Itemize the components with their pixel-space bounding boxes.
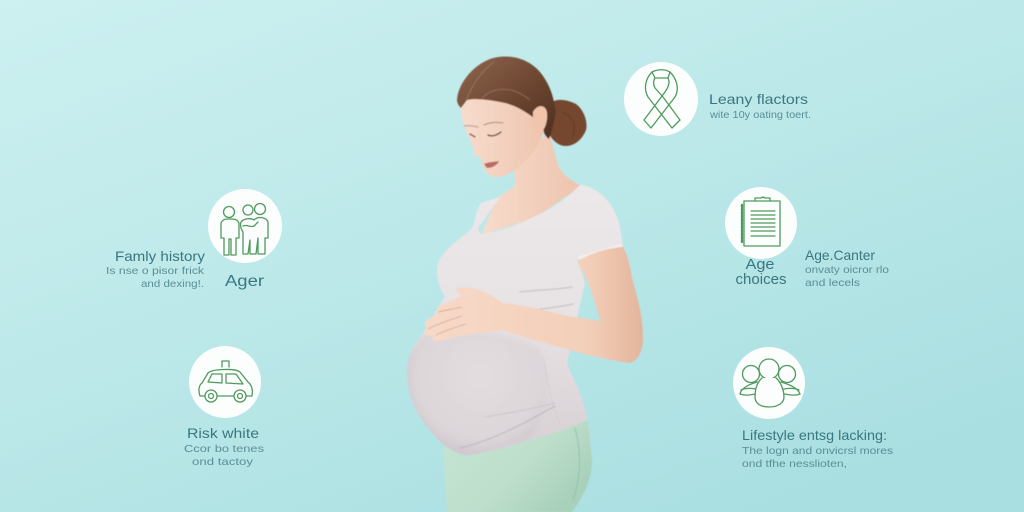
- icon circle: [624, 62, 698, 136]
- heading: family history: Famly history: [115, 248, 205, 264]
- arm and hand: [424, 247, 643, 363]
- caption line 1: Is nse o pisor frick: [106, 265, 205, 277]
- sleeve hem: [578, 245, 622, 258]
- heading: Risk white: [187, 425, 259, 441]
- hair bun: [548, 100, 587, 146]
- heading: Age.Canter: [805, 247, 875, 263]
- shirt folds: [460, 287, 573, 448]
- heading: Leany flactors: [709, 91, 808, 107]
- panel: lifestyle: [733, 347, 893, 470]
- heading: Lifestyle entsg lacking:: [742, 427, 887, 443]
- neck and chest: [481, 132, 581, 235]
- caption line 1: The logn and onvicrsl mores: [742, 445, 893, 457]
- icon: family: [221, 204, 268, 255]
- panel: risk white: [184, 346, 264, 468]
- icon: car: [199, 361, 252, 402]
- panel: family history: [106, 189, 282, 290]
- icon circle: [189, 346, 261, 418]
- lips: [484, 161, 499, 168]
- hair: [457, 57, 556, 139]
- caption line 2: ond tactoy: [192, 456, 254, 468]
- hair highlights: [466, 62, 574, 138]
- caption line 2: and dexing!.: [141, 278, 204, 290]
- finger lines: [428, 307, 466, 335]
- head and face: [461, 85, 548, 177]
- green trousers: [443, 420, 592, 512]
- icon: ribbon: [644, 70, 680, 128]
- belly shading: [407, 336, 462, 453]
- caption line 2: and lecels: [805, 277, 860, 289]
- panel: age choices: [725, 187, 889, 289]
- eye and brow: [464, 122, 503, 137]
- ear: [533, 106, 547, 134]
- caption: wite 10y oating toert.: [709, 109, 811, 121]
- icon: group of people: [740, 359, 800, 407]
- label: ager: Ager: [225, 273, 264, 290]
- icon circle: [208, 189, 282, 263]
- panel: leany factors: [624, 62, 811, 136]
- trouser seam: [573, 428, 580, 500]
- shirt: [407, 185, 623, 455]
- pregnant woman figure: [400, 57, 643, 512]
- label line 2: choices: [736, 272, 786, 288]
- icon: clipboard: [742, 197, 780, 246]
- caption line 1: onvaty oicror rlo: [805, 264, 889, 276]
- icon circle: [733, 347, 805, 419]
- icon circle: [725, 187, 797, 259]
- label: age choices: Age: [746, 257, 774, 273]
- caption line 1: Ccor bo tenes: [184, 443, 264, 455]
- caption line 2: ond tfhe nesslioten,: [742, 458, 847, 470]
